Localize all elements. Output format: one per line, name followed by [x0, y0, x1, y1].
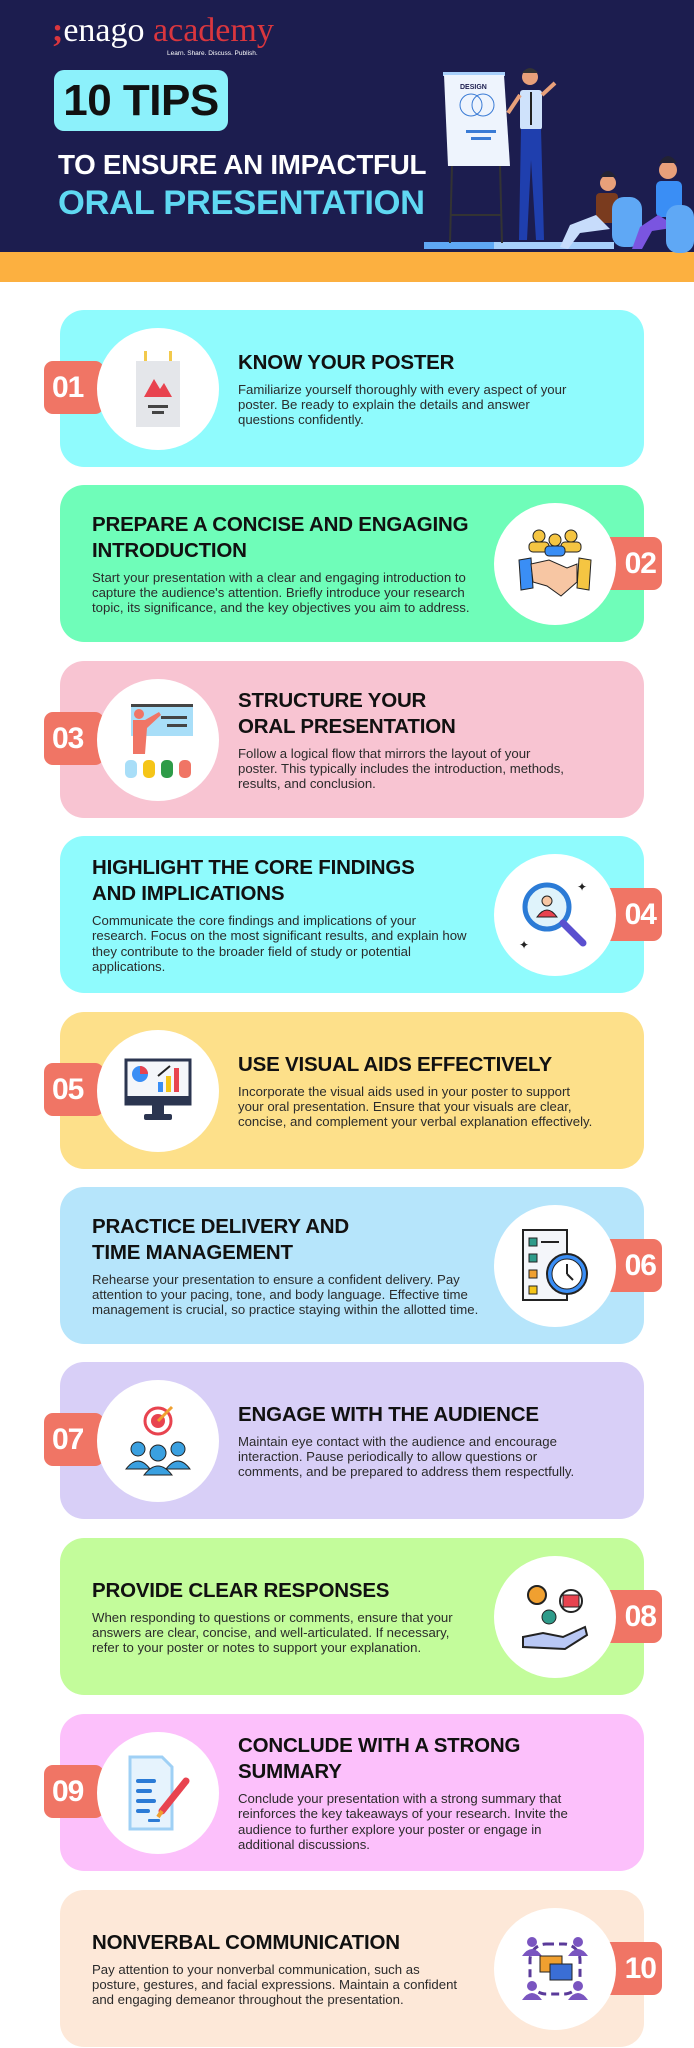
badge 10: 10: [625, 1952, 656, 1985]
badge 05: [44, 1063, 104, 1116]
text: tip 10: posture, gestures, and facial expressions. Maintain a confident: [92, 1977, 457, 1992]
badge 02: 02: [625, 547, 656, 580]
text: tip 04: [92, 856, 467, 974]
logo: Learn. Share. Discuss. Publish.: [167, 50, 258, 57]
text: tip 03: STRUCTURE YOUR: [238, 689, 426, 712]
text: tip 03: ORAL PRESENTATION: [238, 715, 456, 738]
badge 06: [602, 1239, 662, 1292]
badge 06: 06: [625, 1249, 656, 1282]
text: tip 09: additional discussions.: [238, 1837, 370, 1852]
text: tip 01: questions confidently.: [238, 412, 364, 427]
text: tip 08: When responding to questions or comments, ensure that your: [92, 1610, 453, 1625]
text: tip 10: [92, 1931, 457, 2007]
text: tip 01: poster. Be ready to explain the details and answer: [238, 397, 530, 412]
text: tip 09: CONCLUDE WITH A STRONG: [238, 1734, 520, 1757]
text: tip 02: INTRODUCTION: [92, 539, 247, 562]
panel: tip 08: [60, 1538, 662, 1695]
badge 04: [602, 888, 662, 941]
icon: magnifier: ✦: [577, 880, 587, 894]
badge 09: [44, 1765, 104, 1818]
badge 01: 01: [52, 371, 83, 404]
icon: people with chat bubbles: [494, 1908, 616, 2030]
panel: tip 09: [44, 1714, 644, 1871]
text: tip 02: PREPARE A CONCISE AND ENGAGING: [92, 513, 468, 536]
text: tip 09: Conclude your presentation with a strong summary that: [238, 1791, 561, 1806]
text: tip 07: comments, and be prepared to address them respectfully.: [238, 1464, 574, 1479]
badge 07: [44, 1413, 104, 1466]
text: tip 09: reinforces the key takeaways of your research. Invite the: [238, 1806, 568, 1821]
text: tip 05: Incorporate the visual aids used in your poster to support: [238, 1084, 570, 1099]
text: tip 02: capture the audience's attention. Briefly introduce your research: [92, 585, 465, 600]
text: tip 03: Follow a logical flow that mirrors the layout of your: [238, 746, 530, 761]
icon: handshake: [494, 503, 616, 625]
panel: tip 06: [60, 1187, 662, 1344]
text: tip 06: PRACTICE DELIVERY AND: [92, 1215, 349, 1238]
text: tip 06: attention to your pacing, tone, and body language. Effective time: [92, 1287, 468, 1302]
text: tip 01: KNOW YOUR POSTER: [238, 351, 454, 374]
text: tip 04: AND IMPLICATIONS: [92, 882, 284, 905]
badge 08: [602, 1590, 662, 1643]
text: tip 02: Start your presentation with a clear and engaging introduction to: [92, 570, 466, 585]
text: tip 03: [238, 689, 564, 791]
icon: monitor with charts: [97, 1030, 219, 1152]
icon: magnifier: [494, 854, 616, 976]
icon: hand with gears: [494, 1556, 616, 1678]
panel: tip 07: [44, 1362, 644, 1519]
subtitle highlight: ORAL PRESENTATION: [58, 184, 425, 222]
text: tip 01: Familiarize yourself thoroughly with every aspect of your: [238, 382, 566, 397]
text: tip 07: Maintain eye contact with the audience and encourage: [238, 1434, 557, 1449]
icon: poster: [97, 328, 219, 450]
icon: presenter with audience: [97, 679, 219, 801]
text: tip 04: they contribute to the broader field of study or potential: [92, 944, 411, 958]
text: tip 02: [92, 513, 470, 615]
text: tip 04: HIGHLIGHT THE CORE FINDINGS: [92, 856, 415, 879]
badge 07: 07: [52, 1423, 83, 1456]
icon: document with pen: [97, 1732, 219, 1854]
badge 04: 04: [625, 898, 656, 931]
text: tip 08: PROVIDE CLEAR RESPONSES: [92, 1579, 389, 1602]
text: tip 07: [238, 1403, 574, 1479]
badge 01: [44, 361, 104, 414]
text: tip 10: NONVERBAL COMMUNICATION: [92, 1931, 400, 1954]
text: tip 10: and engaging demeanor throughout the presentation.: [92, 1992, 404, 2007]
panel: tip 03: [44, 661, 644, 818]
text: tip 05: [238, 1053, 592, 1129]
panel: tip 05: [44, 1012, 644, 1169]
text: tip 08: [92, 1579, 453, 1655]
text: tip 08: answers are clear, concise, and well-articulated. If necessary,: [92, 1625, 449, 1640]
logo: ;enago academy: [52, 12, 274, 49]
panel: tip 01: [44, 310, 644, 467]
text: tip 07: interaction. Pause periodically to allow questions or: [238, 1449, 537, 1464]
text: tip 05: concise, and complement your verbal explanation effectively.: [238, 1114, 592, 1129]
icon: checklist with clock: [494, 1205, 616, 1327]
text: tip 06: Rehearse your presentation to ensure a confident delivery. Pay: [92, 1272, 460, 1287]
badge 03: 03: [52, 722, 83, 755]
badge 03: [44, 712, 104, 765]
title badge: 10 TIPS: 10 TIPS: [63, 76, 219, 125]
text: tip 06: [92, 1215, 478, 1317]
text: tip 03: results, and conclusion.: [238, 776, 376, 791]
badge 08: 08: [625, 1600, 656, 1633]
text: tip 06: management is crucial, so practice staying within the allotted time.: [92, 1302, 478, 1317]
panel: tip 02: [60, 485, 662, 642]
illustration: presenter and audience: [424, 68, 694, 253]
badge 05: 05: [52, 1073, 83, 1106]
text: tip 06: TIME MANAGEMENT: [92, 1241, 293, 1264]
badge 09: 09: [52, 1775, 83, 1808]
icon: magnifier: ✦: [519, 938, 529, 952]
text: tip 09: audience to further explore your poster or engage in: [238, 1822, 542, 1836]
text: tip 02: topic, its significance, and the key objectives you aim to address.: [92, 600, 470, 615]
text: tip 01: [238, 351, 566, 427]
panel: tip 10: [60, 1890, 662, 2047]
text: tip 05: USE VISUAL AIDS EFFECTIVELY: [238, 1053, 552, 1076]
panel: tip 04: [60, 836, 662, 993]
text: tip 05: your oral presentation. Ensure that your visuals are clear,: [238, 1099, 572, 1114]
text: tip 04: research. Focus on the most significant results, and explain how: [92, 928, 467, 943]
text: tip 09: [238, 1734, 568, 1852]
text: tip 10: Pay attention to your nonverbal communication, such as: [92, 1962, 420, 1977]
subtitle: TO ENSURE AN IMPACTFUL: [58, 149, 426, 180]
badge 02: [602, 537, 662, 590]
illustration: presenter and audience: DESIGN: [460, 84, 487, 91]
text: tip 07: ENGAGE WITH THE AUDIENCE: [238, 1403, 539, 1426]
text: tip 08: refer to your poster or notes to support your explanation.: [92, 1640, 421, 1655]
text: tip 04: applications.: [92, 959, 165, 974]
badge 10: [602, 1942, 662, 1995]
icon: target audience: [97, 1380, 219, 1502]
text: tip 09: SUMMARY: [238, 1760, 342, 1783]
text: tip 03: poster. This typically includes the introduction, methods,: [238, 761, 564, 776]
header banner: [0, 0, 694, 282]
text: tip 04: Communicate the core findings and implications of your: [92, 913, 416, 928]
